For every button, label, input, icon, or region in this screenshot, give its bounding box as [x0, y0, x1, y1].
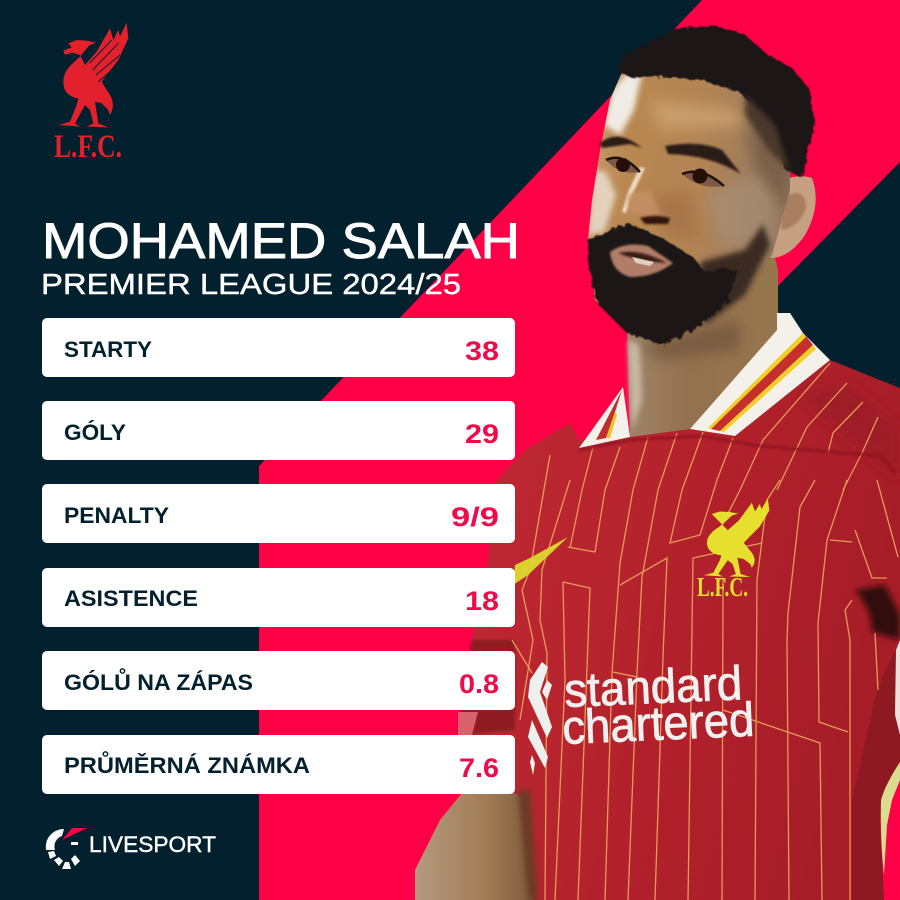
cheek highlight: [588, 170, 616, 235]
jersey collar right: [690, 313, 830, 436]
stat row: asistence: [42, 568, 515, 627]
jersey crest: liverbird and L.F.C.: [697, 498, 769, 602]
stat row: penalty: 9/9: [451, 502, 499, 532]
jersey side panel shadow: [852, 640, 900, 900]
sleeve fold shadow: [855, 585, 900, 640]
stat row: goly: GÓLY: [64, 420, 126, 445]
stat row: prumerna znamka: [42, 735, 515, 794]
stat row: starty: [42, 318, 515, 377]
stat row: asistence: ASISTENCE: [64, 586, 198, 611]
livesport logo: [46, 828, 216, 869]
sponsor text: [561, 657, 755, 755]
forehead highlight: [604, 72, 642, 135]
beard: [588, 223, 738, 345]
nike swoosh: [513, 537, 568, 585]
lips: [610, 244, 673, 277]
stat row: starty: STARTY: [64, 337, 152, 362]
stubble shadow: [700, 224, 770, 325]
sponsor text: standard: [563, 657, 743, 718]
stat row: penalty: [42, 484, 515, 543]
stat row: prumerna znamka: 7.6: [459, 753, 499, 783]
nose highlight: [622, 167, 645, 213]
jersey collar left: [579, 387, 630, 448]
title: MOHAMED SALAH: [42, 213, 520, 269]
hair fade: [745, 95, 790, 172]
eyes: [606, 158, 640, 173]
player arm: [415, 793, 533, 900]
right white sleeve edge: [881, 762, 900, 875]
navy lower-right triangle: [700, 162, 900, 440]
player jersey body: [458, 360, 900, 900]
stat row: golu na zapas: [42, 651, 515, 710]
stat row: starty: 38: [465, 336, 499, 366]
sponsor text: chartered: [561, 694, 755, 755]
stat row: prumerna znamka: PRŮMĚRNÁ ZNÁMKA: [64, 750, 310, 778]
jersey crest: liverbird and L.F.C.: L.F.C.: [697, 572, 748, 602]
stat row: asistence: 18: [465, 586, 499, 616]
eyebrows: [600, 137, 642, 148]
icon: liverbird: [59, 23, 128, 127]
jersey pinstripes: [512, 363, 898, 900]
club logo: Liverpool FC: [54, 23, 128, 165]
LFC letters: L.F.C.: [54, 129, 122, 165]
stat row: goly: [42, 401, 515, 460]
player ear: [764, 176, 816, 258]
face shading: [588, 72, 790, 250]
neck highlights: [628, 340, 642, 430]
stat row: penalty: PENALTY: [64, 503, 169, 528]
player neck: [627, 245, 778, 437]
stat row: golu na zapas: GÓLŮ NA ZÁPAS: [64, 667, 253, 695]
icon: livesport stopwatch: [46, 828, 87, 869]
stat row: golu na zapas: 0.8: [459, 669, 499, 699]
jersey neckline seam: [579, 436, 895, 472]
red diagonal background band: [259, 0, 900, 900]
hair: [618, 26, 815, 178]
brand name: LIVESPORT: [89, 832, 216, 857]
subtitle: PREMIER LEAGUE 2024/25: [41, 269, 461, 301]
stat row: goly: 29: [465, 419, 499, 449]
sponsor emblem: [528, 662, 552, 775]
player face: [588, 62, 790, 346]
player photo illustration: [415, 26, 900, 900]
